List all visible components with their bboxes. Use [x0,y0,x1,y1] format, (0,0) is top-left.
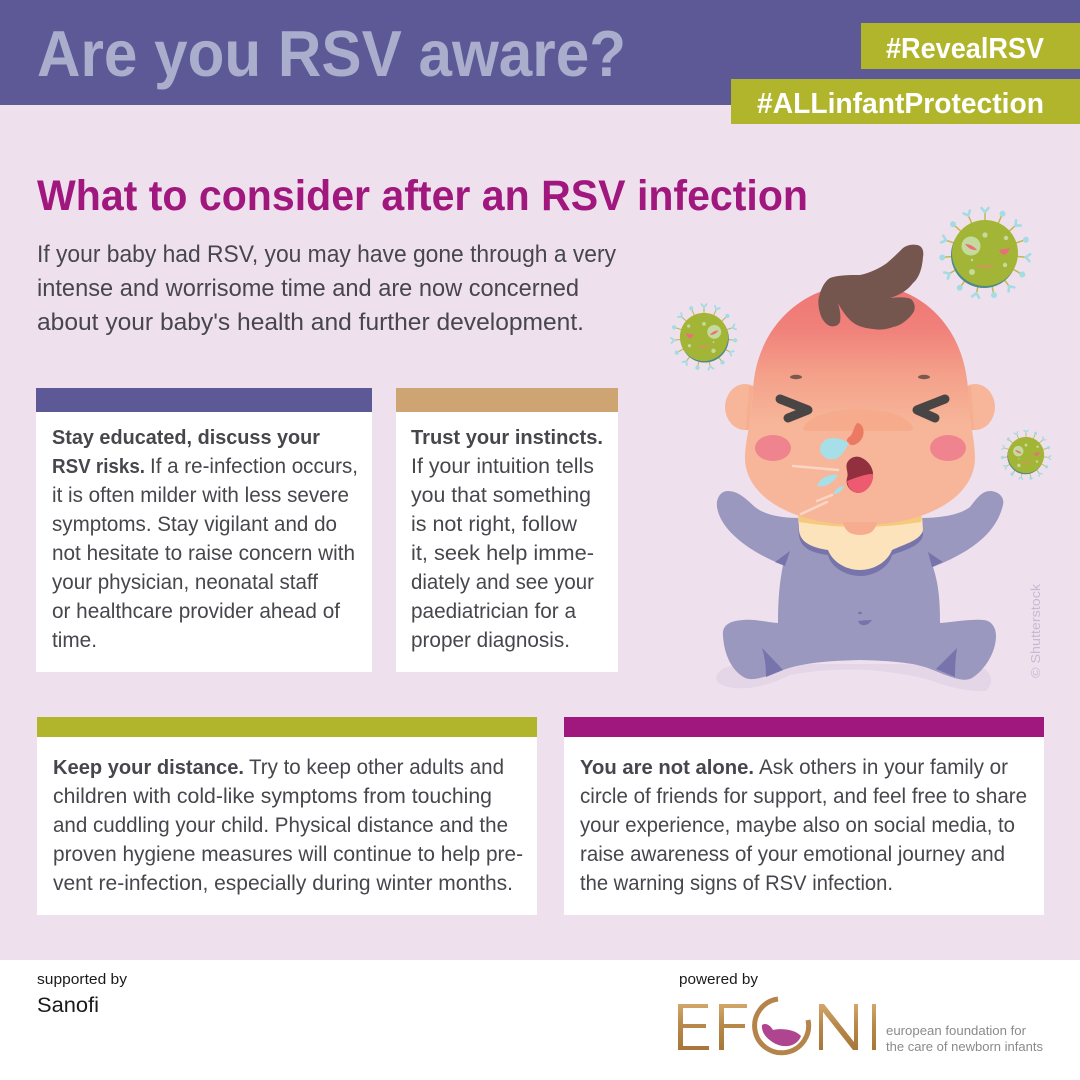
panel: trust your instincts: proper diagnosis. [411,629,570,652]
panel: trust your instincts: paediatrician for a [411,600,576,623]
panel: you are not alone [564,717,1044,915]
heading: What to consider after an RSV infection [37,172,808,220]
icon: virus large [939,208,1030,299]
supporter: Sanofi [37,994,99,1017]
panel: stay educated: not hesitate to raise concern with [52,542,355,565]
supporter: supported by [37,971,128,988]
panel: keep your distance: and cuddling your child. Physical distance and the [53,814,508,837]
panel: stay educated: or healthcare provider ahead of [52,600,340,623]
hashtag: ALLinfantProtection: #ALLinfantProtection [757,88,1044,120]
panel: trust your instincts: is not right, follow [411,513,578,536]
powered by label: powered by [679,971,758,988]
intro text: intense and worrisome time and are now concerned [37,275,579,302]
panel: trust your instincts [396,388,618,672]
panel: you are not alone: Ask others in your family or [759,756,1008,779]
panel: stay educated: your physician, neonatal staff [52,571,318,594]
panel: keep your distance: children with cold-like symptoms from touching [53,785,492,808]
panel: trust your instincts: it, seek help imme- [411,542,594,565]
panel: you are not alone: the warning signs of RSV infection. [580,872,893,895]
supporter [37,971,128,1017]
panel: stay educated: time. [52,629,97,652]
panel: stay educated: symptoms. Stay vigilant and do [52,513,337,536]
illustration: crying baby [716,245,1003,691]
panel: stay educated: it is often milder with less severe [52,484,349,507]
title: Are you RSV aware? [37,17,626,90]
hashtag: ALLinfantProtection [731,79,1080,124]
panel: keep your distance: Keep your distance. [53,756,244,779]
hashtag: RevealRSV [861,23,1080,69]
panel: stay educated [36,388,372,672]
intro text [37,241,616,336]
intro text: If your baby had RSV, you may have gone through a very [37,241,616,268]
header band [0,0,1080,105]
panel: trust your instincts: If your intuition tells [411,455,594,478]
panel: you are not alone: raise awareness of your emotional journey and [580,843,1005,866]
hashtag: RevealRSV: #RevealRSV [886,33,1045,65]
logo: EFCNI [678,999,1043,1054]
icon: virus small [1001,430,1051,480]
panel: stay educated: Stay educated, discuss your [52,426,320,449]
panel: keep your distance: Try to keep other adults and [249,756,504,779]
panel: trust your instincts: you that something [411,484,591,507]
panel: keep your distance: proven hygiene measures will continue to help pre- [53,843,523,866]
panel: you are not alone: circle of friends for support, and feel free to share [580,785,1027,808]
panel: keep your distance: vent re-infection, especially during winter months. [53,872,513,895]
footer band [0,960,1080,1080]
panel: trust your instincts: diately and see your [411,571,594,594]
intro text: about your baby's health and further development. [37,309,584,336]
panel: you are not alone: your experience, maybe also on social media, to [580,814,1015,837]
panel: trust your instincts: Trust your instincts. [411,426,603,449]
logo: EFCNI: european foundation for [886,1023,1027,1038]
panel: you are not alone: You are not alone. [580,756,754,779]
image credit: © Shutterstock [1028,583,1043,678]
logo: EFCNI: the care of newborn infants [886,1039,1043,1054]
panel: keep your distance [37,717,537,915]
panel: stay educated: If a re-infection occurs, [150,455,358,478]
icon: virus left [671,304,738,370]
panel: stay educated: RSV risks. [52,455,145,478]
